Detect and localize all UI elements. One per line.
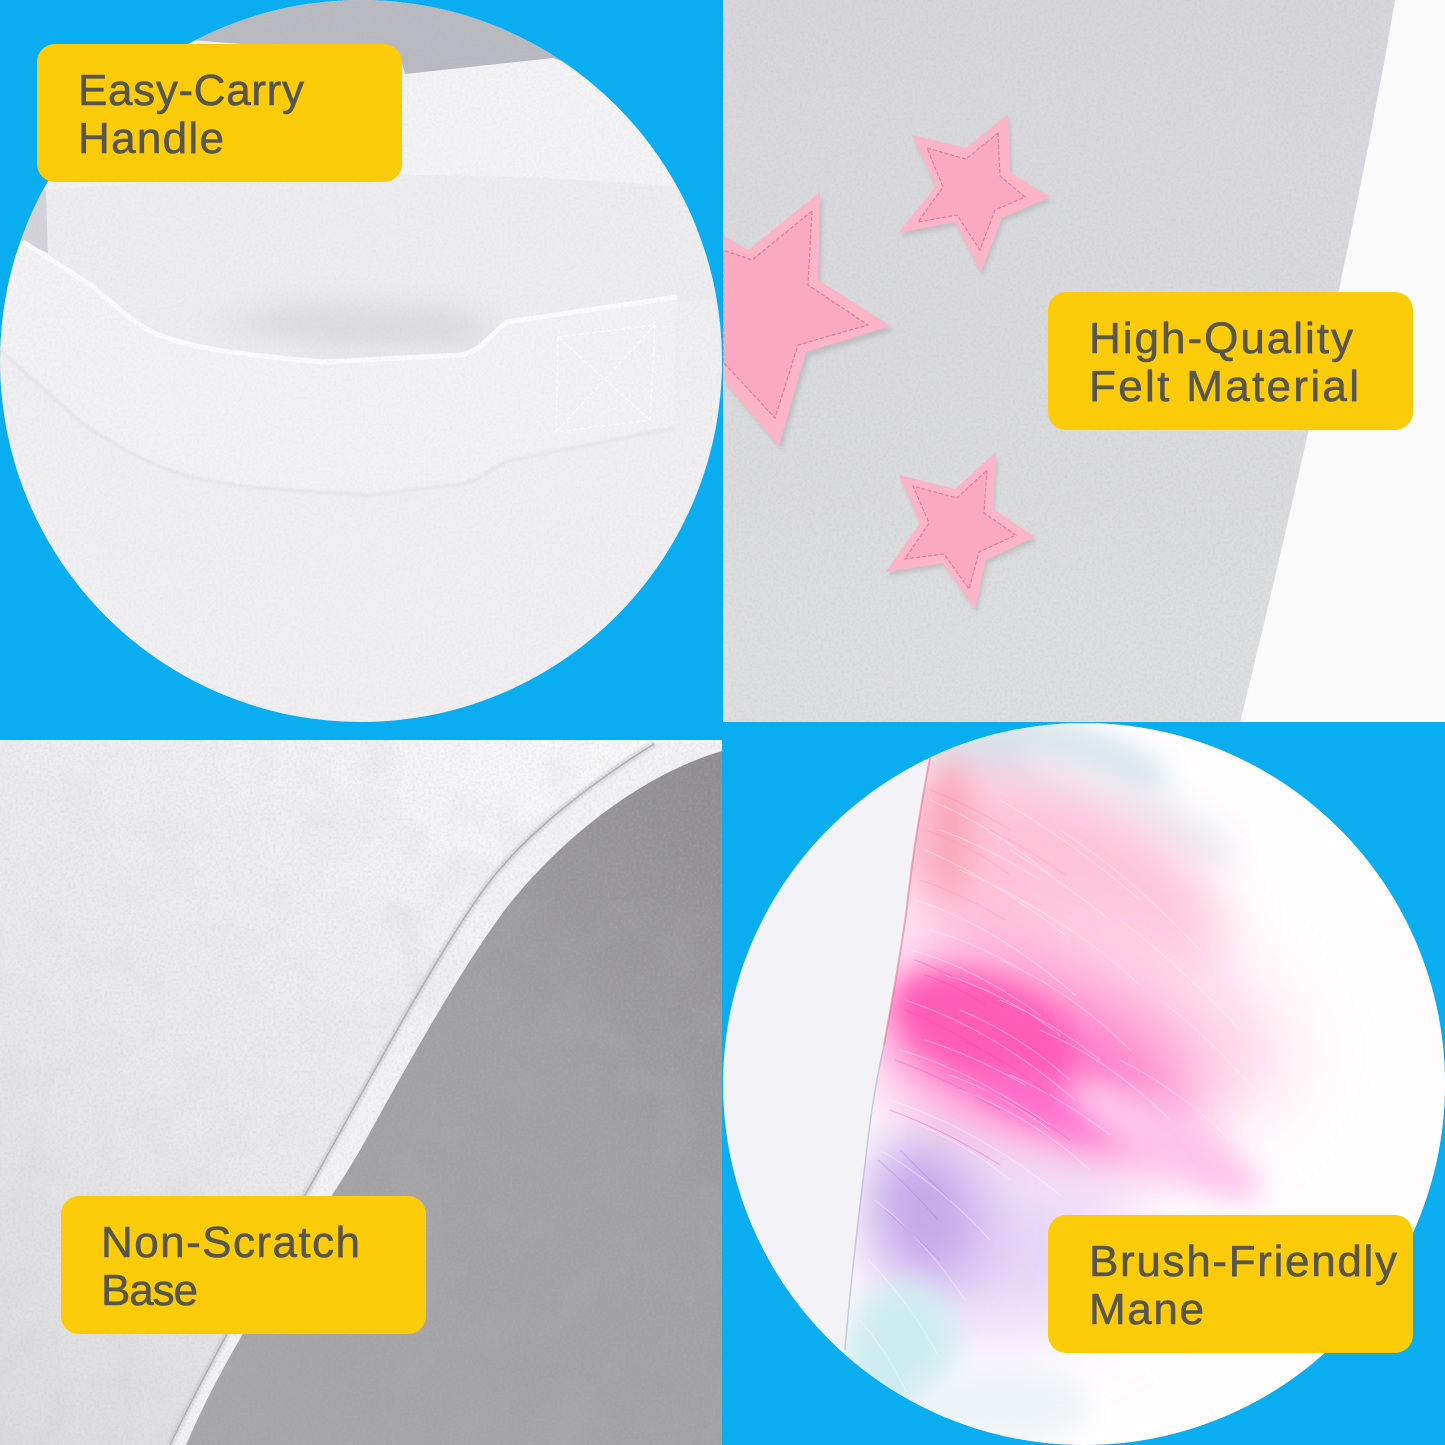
handle strap — [0, 240, 677, 432]
panel: easy-carry handle close-up — [0, 0, 722, 722]
callout: high-quality felt material: Felt Material — [1089, 362, 1359, 411]
rim and dark felt base — [171, 1134, 365, 1445]
star: top right — [898, 114, 1052, 276]
callout: brush-friendly mane — [1048, 1215, 1413, 1353]
panel: high-quality felt material close-up — [723, 0, 1445, 722]
callout: easy-carry handle — [37, 44, 402, 182]
callout: high-quality felt material: High-Quality — [1089, 314, 1353, 363]
seam — [170, 744, 654, 1445]
callout: easy-carry handle: Easy-Carry — [78, 66, 304, 115]
callout: brush-friendly mane: Mane — [1089, 1285, 1204, 1334]
fur strands — [860, 790, 1270, 1400]
fur — [820, 687, 1445, 1445]
edge of felt — [884, 758, 930, 1045]
panel: non-scratch base close-up — [0, 740, 722, 1445]
callout: non-scratch base — [61, 1196, 426, 1334]
callout: brush-friendly mane: Brush-Friendly — [1089, 1237, 1397, 1286]
star: bottom — [886, 452, 1037, 613]
star: large, cut at edge — [723, 192, 894, 451]
callout: high-quality felt material — [1048, 292, 1413, 430]
panel: brush-friendly mane close-up — [723, 687, 1445, 1445]
callout: non-scratch base: Non-Scratch — [101, 1218, 360, 1267]
callout: non-scratch base: Base — [101, 1266, 198, 1315]
callout: easy-carry handle: Handle — [78, 114, 224, 163]
